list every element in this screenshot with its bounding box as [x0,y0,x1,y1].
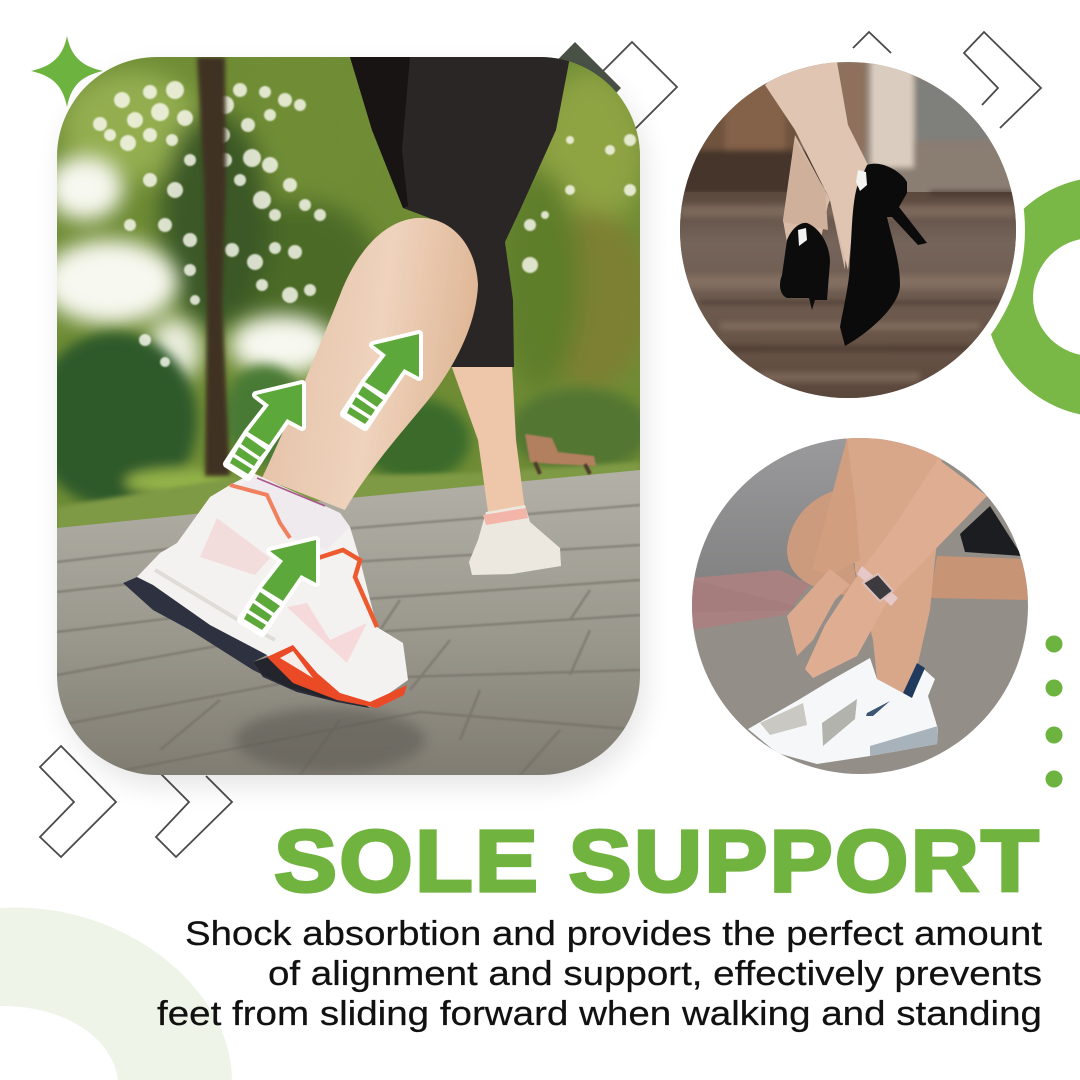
decorative dark diamond top centre [531,42,621,133]
description text: Shock absorbtion and provides the perfect amount [185,915,1043,953]
park background [33,50,650,537]
arrow: lower calf [227,384,302,477]
decorative four green dots [1046,636,1062,788]
paving [57,470,640,775]
white sneaker [748,658,938,764]
black leggings [350,57,570,367]
description text: of alignment and support, effectively prevents [268,955,1042,993]
icon: green four-point sparkle [31,36,103,107]
title: SOLE SUPPORT [274,813,1041,910]
right high heel [840,164,927,346]
thigh, shin and shorts [787,438,1028,695]
decorative green ring right [985,177,1080,417]
decorative diamond outline top centre [586,42,677,133]
front leg [262,218,478,510]
bench [525,434,596,474]
decorative chevrons top right [853,32,1041,128]
decorative chevrons bottom left [40,746,232,857]
description text: feet from sliding forward when walking and standing [157,995,1042,1033]
photo: high heels [680,60,1020,398]
photo: woman walking in park [33,50,650,775]
description text [157,915,1043,1033]
rear leg [450,362,561,575]
legs [765,62,868,290]
smart watch [857,566,898,606]
arrow: on shoe [241,540,316,633]
shoe highlights [798,170,867,246]
front shoe [123,473,408,708]
photo: tying shoelaces [692,438,1028,774]
decorative pale green circle bottom left [0,908,232,1080]
left high heel [780,223,830,310]
white halo behind top photo [671,53,1025,407]
arrow: upper calf [344,334,419,427]
main photo shadow [62,68,645,786]
arms and hands [787,438,987,678]
shoe sole [123,577,370,707]
